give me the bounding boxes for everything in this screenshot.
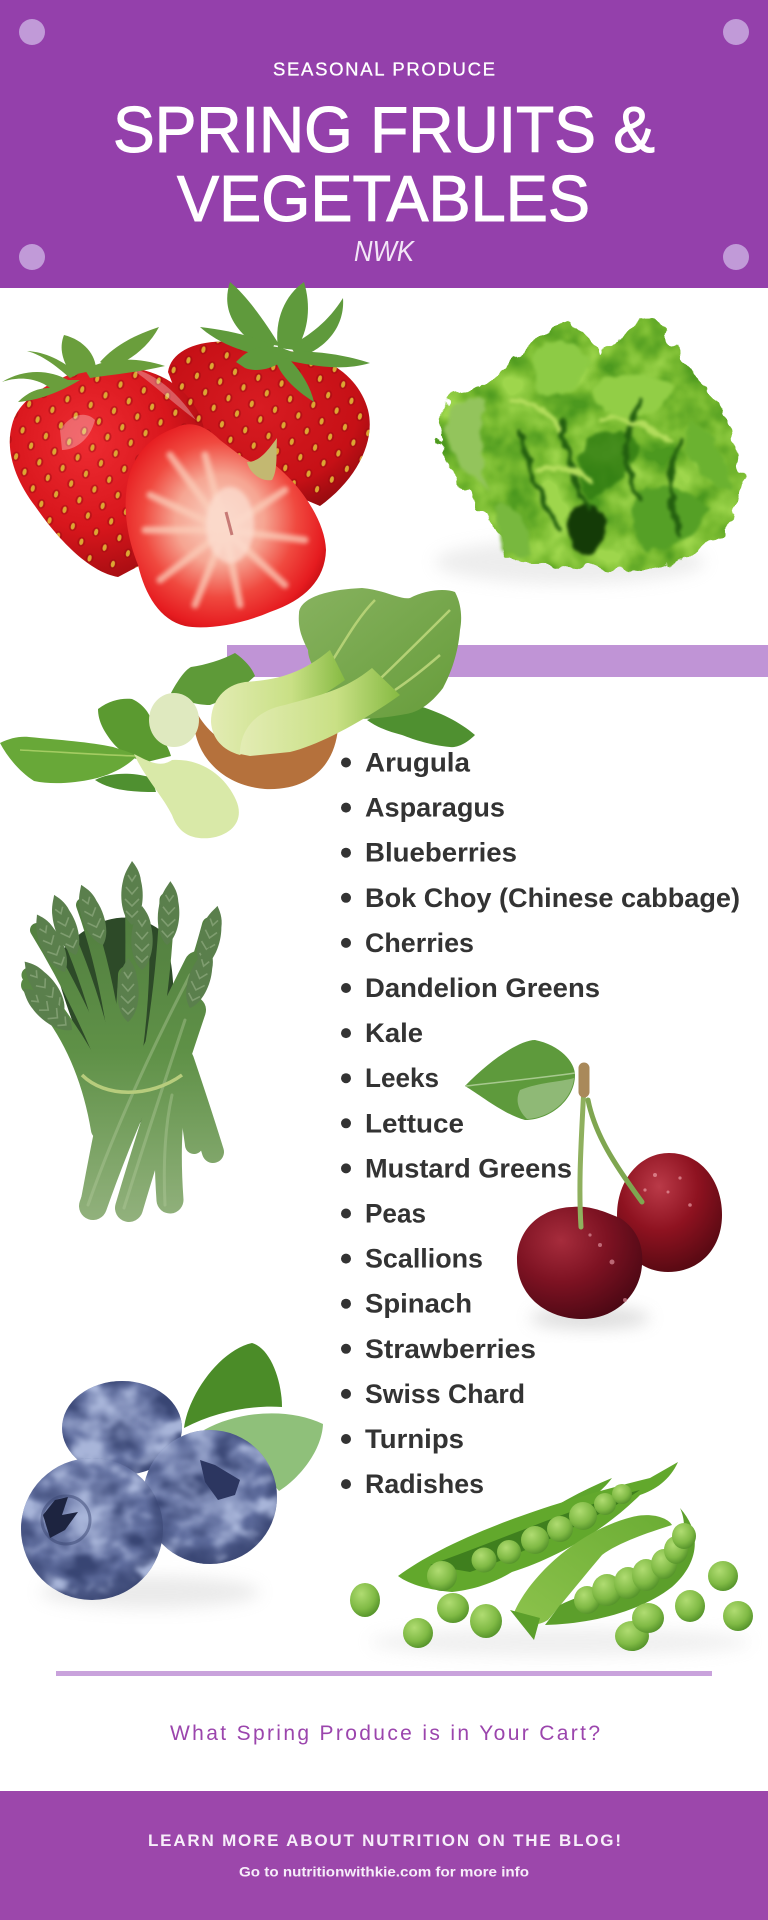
- list item: Scallions: Scallions: [365, 1244, 483, 1274]
- logo: NWK handwriting: NWK: [354, 236, 415, 268]
- peas shadow: [370, 1628, 750, 1656]
- list item: Kale: [341, 1018, 423, 1048]
- list item: Cherries: Cherries: [365, 928, 474, 958]
- cut strawberry half: [126, 424, 326, 627]
- peas in top pod: [427, 1484, 632, 1591]
- list item: Swiss Chard: Swiss Chard: [365, 1379, 525, 1409]
- title: SPRING FRUITS &: [113, 93, 655, 166]
- lettuce head: [438, 318, 742, 572]
- list item: Asparagus: Asparagus: [365, 793, 505, 823]
- left strawberry: [2, 327, 205, 577]
- list item: Arugula: Arugula: [365, 748, 470, 778]
- stalk highlights: [88, 975, 190, 1208]
- small white head: [149, 693, 199, 747]
- title: VEGETABLES: [177, 162, 590, 235]
- footer heading: LEARN MORE ABOUT NUTRITION ON THE BLOG!: [148, 1831, 621, 1850]
- call to action question: What Spring Produce is in Your Cart?: [170, 1722, 600, 1745]
- top open pod: [398, 1462, 678, 1592]
- cherry stems: [580, 1068, 642, 1227]
- lower closed pod: [514, 1515, 672, 1624]
- low right leaf: [367, 705, 475, 747]
- divider line: [56, 1671, 712, 1676]
- produce list: [341, 748, 740, 1499]
- accent band: [227, 645, 768, 677]
- stems in bowl: [211, 650, 400, 756]
- lettuce shadow: [435, 540, 705, 584]
- list item: Spinach: Spinach: [365, 1289, 472, 1319]
- right cherry: [617, 1153, 722, 1272]
- list item: Peas: Peas: [365, 1198, 426, 1228]
- cherry shadow: [530, 1307, 650, 1329]
- peas in lower pod: [574, 1523, 696, 1614]
- blueberry shadow: [40, 1576, 260, 1608]
- list item: Kale: Kale: [365, 1018, 423, 1048]
- front berry: [21, 1458, 163, 1600]
- light leaf: [204, 1413, 323, 1491]
- cherry leaf: [465, 1040, 575, 1120]
- list item: Strawberries: Strawberries: [365, 1334, 536, 1364]
- dark leaf: [184, 1343, 282, 1428]
- twine: [82, 1075, 182, 1092]
- image: peas: [350, 1462, 753, 1656]
- list item: Bok Choy: Bok Choy (Chinese cabbage): [365, 883, 740, 913]
- list item: Radishes: Radishes: [365, 1469, 484, 1499]
- lower open pod: [510, 1508, 696, 1640]
- wooden bowl: [194, 708, 338, 789]
- image: lettuce: [435, 318, 742, 584]
- title: [113, 93, 655, 235]
- image: strawberries: [2, 282, 370, 627]
- main leaf: [299, 588, 461, 719]
- panel: footer: [0, 1791, 768, 1920]
- image: bok choy: [0, 588, 475, 838]
- spear tips: [16, 861, 228, 1038]
- eyebrow: seasonal produce: SEASONAL PRODUCE: [273, 58, 495, 80]
- back leaf top-left: [171, 653, 255, 705]
- image: cherries: [465, 1040, 722, 1329]
- list item: Turnips: Turnips: [365, 1424, 464, 1454]
- left leaves: [0, 699, 171, 792]
- list item: Blueberries: Blueberries: [365, 838, 517, 868]
- image: blueberries: [21, 1343, 323, 1608]
- footer link text: Go to nutritionwithkie.com for more info: [239, 1864, 529, 1880]
- panel: header banner: [0, 0, 768, 288]
- back pod: [500, 1478, 612, 1545]
- list item: Leeks: Leeks: [365, 1063, 439, 1093]
- right berry: [143, 1430, 277, 1564]
- image: asparagus: [16, 861, 228, 1208]
- decorative corner dots: [19, 19, 749, 270]
- list item: Lettuce: Lettuce: [365, 1108, 464, 1138]
- stalks: [29, 880, 213, 1208]
- bottom bulb and stalk: [134, 754, 239, 838]
- dark shadow of bundle: [55, 918, 174, 1150]
- right strawberry: [168, 282, 370, 506]
- list item: Dandelion Greens: Dandelion Greens: [365, 973, 600, 1003]
- list item: Mustard Greens: Mustard Greens: [365, 1153, 572, 1183]
- loose peas: [350, 1561, 753, 1651]
- left cherry: [517, 1207, 642, 1319]
- back berry: [62, 1381, 182, 1475]
